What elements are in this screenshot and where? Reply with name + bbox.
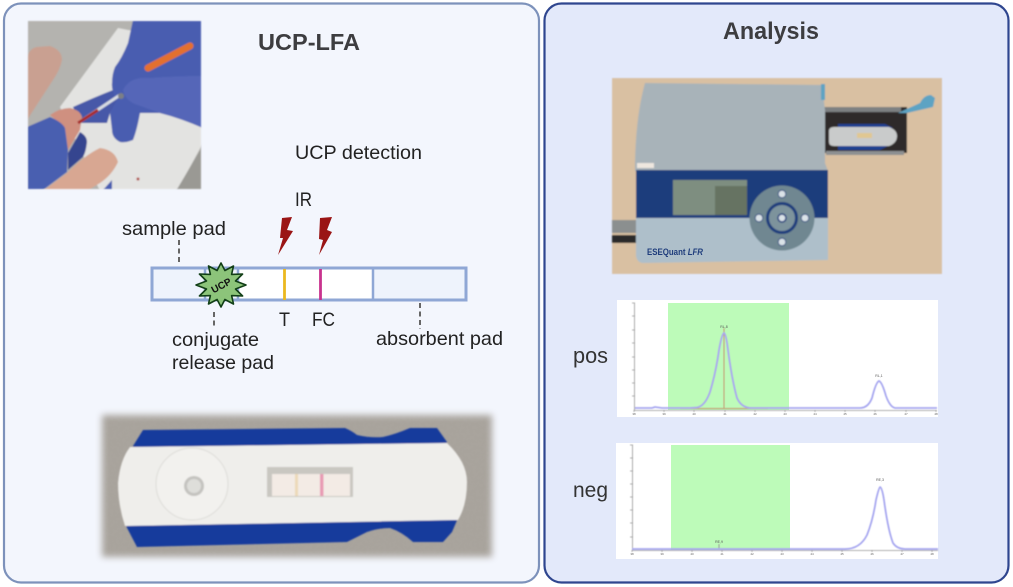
peak labels [715, 478, 884, 544]
label: conjugate release pad: release pad [172, 352, 274, 374]
icon: green UCP particle burst: UCP [210, 276, 234, 296]
icon: IR lightning bolt over T line [278, 217, 293, 255]
photo: test cassette [95, 407, 500, 565]
axis labels: 39 [662, 412, 666, 416]
axis labels: 39 [660, 552, 664, 556]
chart: negative sample [616, 443, 938, 559]
axis labels: 41 [723, 412, 727, 416]
label: UCP detection: UCP detection [295, 142, 422, 164]
axis labels: 45 [843, 412, 847, 416]
axis labels: 38 [630, 552, 634, 556]
axis labels: 44 [810, 552, 814, 556]
axis labels: 46 [870, 552, 874, 556]
icon: IR lightning bolt over FC line [319, 217, 332, 255]
axis labels: 44 [813, 412, 817, 416]
axis labels: 41 [720, 552, 724, 556]
flow control line FC [319, 269, 322, 300]
photo: ESEQuant LFR reader: ESEQuant LFR [647, 247, 703, 257]
label: pos: pos [573, 343, 608, 368]
axis labels: 43 [780, 552, 784, 556]
panel: UCP-LFA [4, 4, 539, 582]
axis labels: 38 [632, 412, 636, 416]
axis labels: 43 [783, 412, 787, 416]
label: IR: IR [295, 189, 312, 211]
label: neg: neg [573, 479, 608, 502]
axis labels: 48 [934, 412, 938, 416]
axis labels: 45 [840, 552, 844, 556]
title: Analysis: Analysis [723, 18, 819, 45]
panel: Analysis [544, 4, 1008, 582]
axis labels: 47 [904, 412, 908, 416]
axis labels: 42 [753, 412, 757, 416]
test zone highlight [668, 303, 789, 410]
chart: positive sample [617, 300, 938, 417]
peak labels [720, 325, 883, 378]
peak labels: RE,9 [715, 540, 723, 544]
photo: ESEQuant LFR reader [610, 77, 943, 275]
axis labels [632, 412, 938, 416]
lateral flow strip diagram [152, 268, 466, 300]
peak labels: RL,8 [720, 325, 728, 329]
axis labels [630, 552, 934, 556]
axis labels: 40 [692, 412, 696, 416]
peak labels: RE,3 [876, 478, 884, 482]
axis labels: 42 [750, 552, 754, 556]
leader lines to pads [179, 240, 420, 329]
photo: sampling a finger-prick blood sample [26, 19, 203, 191]
label: FC: FC [312, 309, 335, 331]
icon: green UCP particle burst [196, 263, 246, 307]
test line T [283, 269, 286, 300]
peak labels: RL,1 [875, 374, 883, 378]
label: absorbent pad: absorbent pad [376, 328, 503, 350]
test zone highlight [671, 445, 790, 550]
label: T: T [279, 309, 290, 331]
axis labels: 46 [873, 412, 877, 416]
label: sample pad: sample pad [122, 218, 226, 240]
axis labels: 40 [690, 552, 694, 556]
axis labels: 47 [900, 552, 904, 556]
axis labels: 48 [930, 552, 934, 556]
label: conjugate release pad: conjugate [172, 329, 259, 351]
title: UCP-LFA: UCP-LFA [258, 29, 360, 55]
